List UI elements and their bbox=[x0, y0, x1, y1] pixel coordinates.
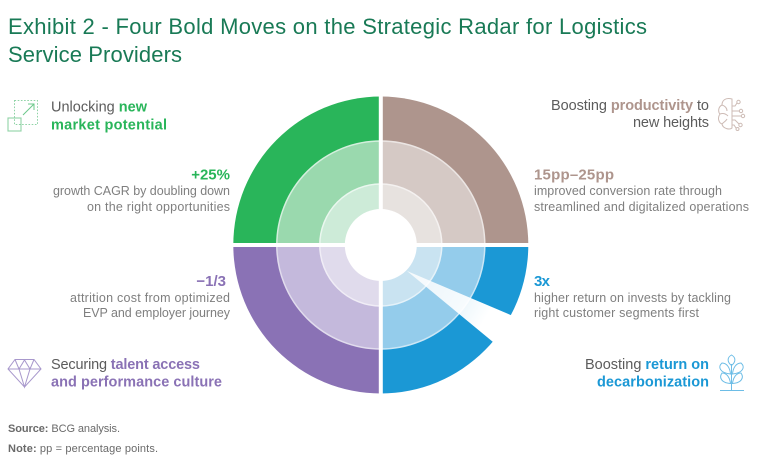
quadrant: decarbonization (blue) bbox=[381, 245, 528, 394]
panel: boosting return on decarbonization bbox=[534, 273, 744, 390]
quadrant: productivity (taupe) bbox=[381, 96, 528, 245]
heading: market potential bbox=[51, 118, 167, 134]
title bbox=[8, 14, 647, 67]
stat: 3x bbox=[534, 273, 731, 320]
icon: diamond bbox=[8, 360, 41, 387]
stat: 15pp–25pp: 15pp–25pp bbox=[534, 166, 614, 184]
heading bbox=[51, 100, 167, 134]
icon: plant bbox=[720, 355, 744, 390]
title: Service Providers bbox=[8, 42, 182, 67]
heading: decarbonization bbox=[597, 374, 709, 390]
stat: −1/3 bbox=[70, 273, 231, 320]
footnotes bbox=[8, 423, 158, 455]
heading: Boosting return on bbox=[585, 357, 709, 373]
icon: expanding squares bbox=[8, 100, 38, 131]
stat: +25% bbox=[53, 166, 230, 214]
heading: Securing talent access bbox=[51, 357, 200, 373]
heading: and performance culture bbox=[51, 374, 222, 390]
stat: +25%: on the right opportunities bbox=[87, 200, 230, 214]
heading: Unlocking new bbox=[51, 100, 148, 116]
stat: 3x: higher return on invests by tackling bbox=[534, 291, 731, 305]
heading: Boosting productivity to bbox=[551, 98, 709, 114]
heading: new heights bbox=[633, 115, 709, 131]
heading bbox=[585, 357, 709, 390]
heading bbox=[551, 98, 709, 131]
stat: −1/3: attrition cost from optimized bbox=[70, 291, 230, 305]
stat: 15pp–25pp: improved conversion rate through bbox=[534, 184, 722, 198]
stat: 3x: 3x bbox=[534, 273, 551, 290]
stat: 3x: right customer segments first bbox=[534, 306, 700, 320]
quadrant: market potential (green) bbox=[233, 96, 381, 245]
footnotes: Note: pp = percentage points. bbox=[8, 443, 158, 455]
icon: brain bbox=[719, 98, 745, 130]
radial chart bbox=[231, 95, 531, 395]
heading bbox=[51, 357, 222, 390]
stat: 15pp–25pp bbox=[534, 166, 749, 214]
stat: −1/3: EVP and employer journey bbox=[83, 306, 231, 320]
stat: −1/3: −1/3 bbox=[196, 273, 226, 290]
footnotes: Source: BCG analysis. bbox=[8, 423, 120, 435]
title: Exhibit 2 - Four Bold Moves on the Strategic Radar for Logistics bbox=[8, 14, 647, 39]
panel: boosting productivity bbox=[534, 98, 749, 214]
stat: +25%: +25% bbox=[191, 166, 230, 184]
stat: 15pp–25pp: streamlined and digitalized operations bbox=[534, 200, 749, 214]
quadrant: talent (purple) bbox=[233, 245, 381, 394]
highlight wedge bbox=[407, 271, 513, 342]
stat: +25%: growth CAGR by doubling down bbox=[53, 184, 230, 198]
panel: securing talent access bbox=[8, 273, 231, 390]
panel: unlocking new market potential bbox=[8, 100, 230, 214]
